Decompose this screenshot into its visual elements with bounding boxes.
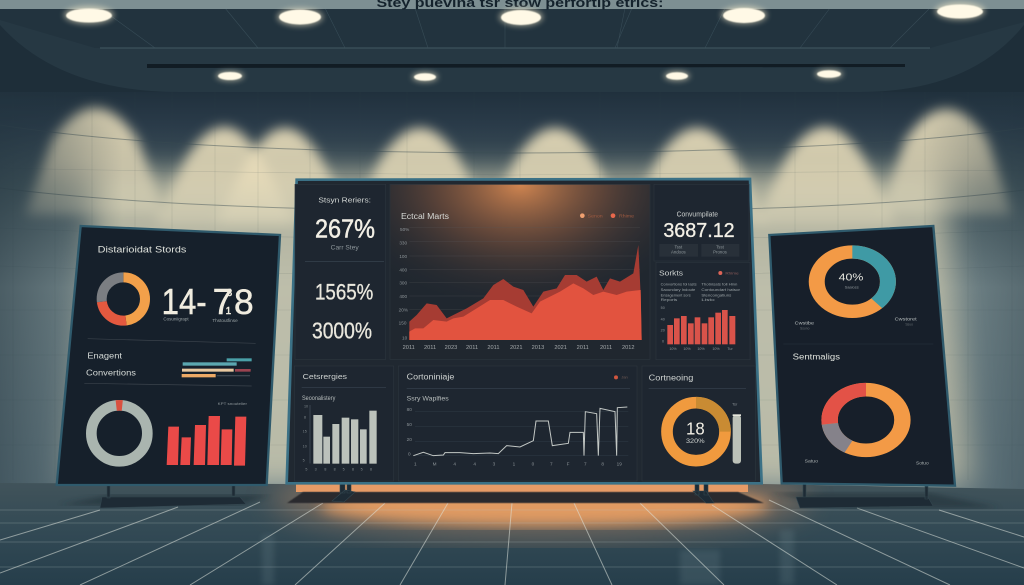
- panel: categories bars: 8: [304, 415, 306, 419]
- panel: categories bars: 5: [305, 467, 307, 471]
- panel: categories bars: 5: [361, 467, 363, 471]
- panel: headline stats: Carr Stey: [331, 245, 359, 251]
- panel: series bar chart: Listo: [701, 298, 715, 302]
- donut labels: Cwstoret: [895, 317, 917, 323]
- panel: conversions: Pronos: [713, 249, 727, 254]
- chart legend: Rhime: [619, 213, 634, 218]
- chart legend: [580, 213, 634, 218]
- panel: donut gauge: Tsr: [732, 402, 738, 407]
- panel: series bar chart: Stencongatiuns: [701, 293, 732, 297]
- right display panel: Satuo: [805, 458, 819, 463]
- x axis labels: 2011: [466, 345, 478, 351]
- slot in soffit: [147, 64, 905, 68]
- donut labels: Cwstibe: [795, 321, 814, 327]
- panel: series bar chart: 10%: [712, 347, 720, 351]
- panel: line chart: 3: [493, 462, 496, 467]
- panel: series bar chart: 10%: [697, 347, 705, 351]
- right panel heading: Sentmaligs: [793, 351, 840, 361]
- donut: left top: [102, 277, 145, 321]
- x axis labels: 2012: [622, 345, 635, 351]
- x axis labels: 2011: [424, 345, 436, 351]
- panel shadow on floor: [287, 492, 764, 503]
- panel: donut gauge: 320%: [686, 438, 705, 445]
- donut: left bottom: [91, 405, 147, 461]
- ceiling banner: [0, 0, 1024, 10]
- donut labels: Ssuno: [800, 326, 810, 330]
- panel: series bar chart: Ensagement sors: [661, 293, 691, 297]
- panel: headline stats: 267%: [315, 214, 375, 244]
- stands: [100, 483, 933, 508]
- y axis labels: 100: [399, 254, 408, 259]
- big number: 7: [213, 281, 233, 322]
- panel: donut gauge: 18: [686, 418, 705, 438]
- panel: line chart: 1: [414, 462, 417, 467]
- panel: line chart: 4: [453, 462, 456, 467]
- panel: line chart: 7: [584, 462, 587, 467]
- panel: series bar chart: 40: [661, 317, 665, 321]
- panel: line chart: 4: [473, 462, 476, 467]
- x axis labels: 2013: [532, 345, 544, 351]
- x axis labels: 2011: [487, 345, 500, 351]
- donut labels: [795, 317, 917, 330]
- panel: headline stats: Stsyn Reriers:: [318, 195, 371, 204]
- right display panel: Sotuo: [916, 461, 929, 466]
- line series: [413, 407, 627, 456]
- panel: line chart: 19: [617, 462, 622, 467]
- panel: line chart: M: [433, 462, 437, 467]
- panel: series bar chart: [656, 262, 750, 360]
- dark area series: [409, 245, 642, 340]
- y axis labels: 20%: [399, 307, 408, 312]
- big number: Cosuniigrapt: [163, 317, 189, 322]
- panel: headline stats: 1565%: [315, 279, 373, 304]
- x axis labels: 2011: [403, 345, 415, 351]
- big number: [162, 281, 254, 323]
- panel: line chart: [398, 366, 637, 481]
- panel: categories bars: 8: [324, 467, 326, 471]
- panel: conversions: Convumpilate: [677, 209, 718, 218]
- panel: categories bars: 5: [303, 459, 305, 463]
- x axis labels: 2021: [510, 345, 523, 351]
- panel: categories bars: 10: [304, 405, 308, 409]
- y axis labels: 50%: [400, 227, 409, 232]
- panel: headline stats: [295, 184, 386, 359]
- panel: line chart: 7: [550, 462, 553, 467]
- donut: right top: [817, 252, 888, 311]
- big number: 8: [227, 288, 233, 299]
- panel: categories bars: [294, 366, 394, 481]
- panel: series bar chart: Convortions fol lasts: [661, 283, 697, 287]
- panel: categories bars: 5: [343, 467, 345, 471]
- y axis labels: 300: [399, 281, 408, 286]
- panel: conversions: Andoos: [671, 249, 686, 254]
- horizontal bars: [182, 358, 252, 377]
- panel: line chart: F: [567, 462, 570, 467]
- panel: area chart: [390, 184, 650, 359]
- panel: series bar chart: Sorkts: [659, 269, 683, 278]
- x axis labels: 2023: [445, 345, 457, 351]
- panel: conversions: 3687.12: [663, 220, 735, 242]
- central display panel: [287, 179, 762, 483]
- panel: series bar chart: Rhime: [725, 270, 740, 275]
- y axis labels: 150: [399, 321, 407, 326]
- panel: series bar chart: 50: [661, 306, 665, 310]
- y axis labels: 330: [399, 240, 408, 245]
- big number: 14-: [162, 281, 207, 322]
- panel: conversions: [654, 184, 749, 261]
- panel: donut gauge: [642, 366, 755, 481]
- chart legend: Senon: [588, 213, 603, 218]
- right display panel: [769, 226, 955, 486]
- panel: series bar chart: 10%: [683, 347, 691, 351]
- panel: line chart: 80: [407, 407, 412, 412]
- panel: categories bars: Cetsrergies: [303, 372, 347, 381]
- left panel title: Distarioidat Stords: [98, 244, 187, 254]
- ceiling lights: [64, 2, 985, 82]
- y axis labels: 400: [399, 267, 408, 272]
- panel: donut gauge: Cortneoing: [649, 373, 693, 382]
- panel: categories bars: Seoonalistery: [302, 396, 335, 402]
- panel: categories bars: 8: [334, 467, 336, 471]
- panel: categories bars: 8: [352, 467, 354, 471]
- panel: categories bars: 10: [303, 444, 307, 448]
- x axis labels: [403, 345, 635, 351]
- panel: series bar chart: Saoundary Indoute: [661, 288, 695, 292]
- panel: line chart: Cortoniniaje: [407, 373, 455, 382]
- bar chart: left bottom: [167, 401, 248, 466]
- y axis labels: 400: [399, 294, 408, 299]
- panel: line chart: Jan: [621, 375, 628, 380]
- panel: area chart: Ectcal Marts: [401, 212, 449, 221]
- big number: Thstoutfinse: [212, 318, 238, 323]
- y axis labels: [399, 227, 409, 340]
- ceiling: [0, 0, 1024, 92]
- panel: line chart: 8: [601, 462, 604, 467]
- bright area series: [409, 283, 642, 340]
- x axis labels: 2021: [554, 345, 567, 351]
- right display panel: 40%: [839, 273, 863, 284]
- panel: line chart: 1: [513, 462, 516, 467]
- panel: series bar chart: Tur: [727, 347, 733, 351]
- x axis labels: 2011: [600, 345, 612, 351]
- panel: line chart: 0: [408, 451, 411, 456]
- donut labels: Ssuo: [905, 322, 913, 326]
- right display panel: Saaioss: [845, 285, 859, 290]
- panel: categories bars: 15: [303, 429, 307, 433]
- panel: line chart: 0: [532, 462, 535, 467]
- panel: conversions: Tsst: [716, 244, 725, 249]
- panel: series bar chart: Reports: [661, 298, 678, 302]
- panel: series bar chart: 10%: [669, 347, 677, 351]
- panel: categories bars: 8: [370, 467, 372, 471]
- panel: series bar chart: 20: [661, 329, 665, 333]
- engagement labels: Convertions: [86, 367, 137, 377]
- donut: right bottom: [830, 390, 902, 450]
- panel: series bar chart: 0: [662, 340, 664, 344]
- engagement labels: Enagent: [87, 351, 123, 361]
- panel: categories bars: 3: [315, 467, 317, 471]
- engagement labels: [86, 351, 137, 377]
- back wall: [0, 85, 1024, 490]
- x axis labels: 2011: [577, 345, 589, 351]
- panel: series bar chart: Contoundart hatsor: [701, 288, 741, 292]
- panel: line chart: Ssry Waplfies: [407, 395, 449, 402]
- panel: line chart: 20: [407, 437, 412, 442]
- big number: 8: [234, 283, 254, 322]
- big number: 1: [226, 306, 232, 317]
- panel: line chart: 50: [407, 422, 412, 427]
- panel: series bar chart: Thotnisats foll Hinn: [701, 283, 737, 287]
- floor: [0, 483, 1024, 585]
- left display panel: [57, 226, 280, 485]
- y axis labels: 10: [402, 335, 408, 340]
- bar chart: left bottom: KPT snoutelier: [218, 401, 248, 406]
- panel: headline stats: 3000%: [312, 318, 372, 344]
- panel: conversions: Tsst: [674, 244, 683, 249]
